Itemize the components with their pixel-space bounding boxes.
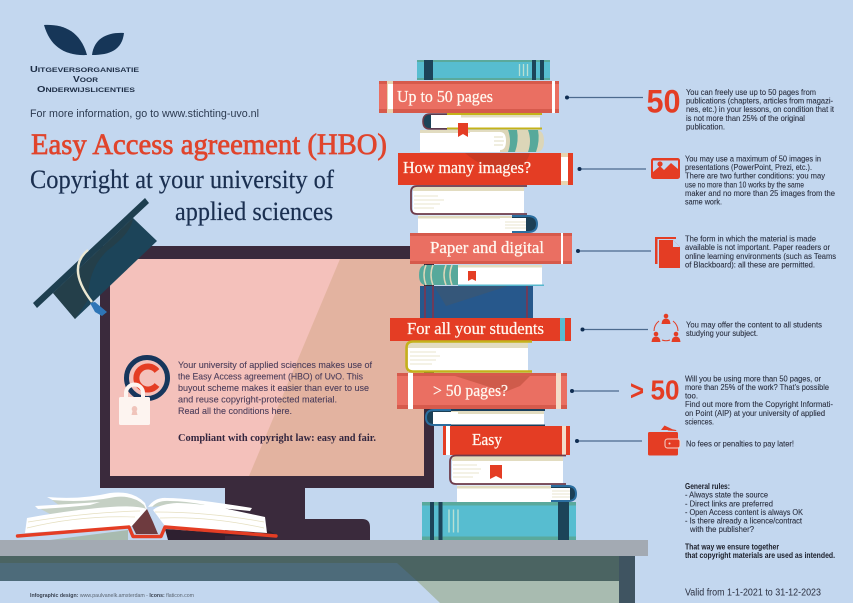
subtitle: Copyright at your university of (30, 164, 334, 194)
book: blue (420, 286, 533, 318)
text: images: There are two further conditions: you may (685, 172, 825, 181)
icon: more than 50 (630, 374, 680, 406)
text: more than 50 pages: too. (685, 392, 698, 401)
text: up to 50 pages (686, 88, 835, 132)
text: images: maker and no more than 25 images from the (685, 189, 835, 198)
intro text on monitor: buyout scheme makes it easier than ever to use (178, 382, 369, 393)
book: easy (443, 426, 570, 455)
intro text on monitor: Read all the conditions here. (178, 405, 292, 416)
text: more than 50 pages (685, 374, 833, 426)
intro text on monitor (178, 359, 376, 444)
text: paper and digital: online learning environments (such as Teams (685, 252, 836, 261)
monitor (100, 246, 434, 540)
text: all students (686, 320, 822, 338)
book: more than 50 pages: > 50 pages? (433, 381, 508, 400)
book: paper and digital (410, 233, 572, 264)
general rules: - Direct links are preferred (685, 499, 773, 508)
text: paper and digital: The form in which the material is made (685, 234, 816, 244)
text: more than 50 pages: Will you be using more than 50 pages, or (685, 374, 821, 384)
text: more than 50 pages: Find out more from the Copyright Informati- (685, 400, 833, 409)
general rules: - Is there already a licence/contract (685, 516, 803, 526)
general rules: That way we ensure together (685, 542, 779, 552)
intro text on monitor: and reuse copyright-protected material. (178, 394, 337, 404)
general rules (685, 482, 835, 560)
icon: image (651, 158, 680, 179)
text: all students: You may offer the content to all students (686, 320, 822, 330)
book: white with blue spine (457, 486, 576, 502)
icon: more than 50: 50 (650, 374, 680, 406)
bookmark (458, 123, 468, 137)
book: paper and digital: Paper and digital (430, 238, 544, 257)
text: up to 50 pages: You can freely use up to 50 pages from (686, 88, 816, 97)
general rules: with the publisher? (689, 525, 755, 534)
book: how many images: How many images? (403, 158, 531, 177)
credits: Infographic design: www.paulvanelk.amsterdam - Icons: flaticon.com (30, 593, 194, 599)
book: up to 50 pages: Up to 50 pages (397, 87, 493, 106)
book stack (379, 60, 576, 540)
text: more than 50 pages: on Point (AIP) at your university of applied (685, 409, 825, 418)
website note: For more information, go to www.stichting-uvo.nl (30, 108, 259, 120)
open book (18, 492, 278, 540)
text: images: use no more than 10 works by the same (685, 180, 804, 189)
icon: students (652, 314, 680, 342)
logo: UvO leaves and wordmark: U ITGEVERSORGANISATIE (30, 65, 139, 74)
text: up to 50 pages: publications (chapters, articles from magazi- (686, 96, 833, 106)
book: white with maroon cover (411, 186, 527, 214)
text: images: You may use a maximum of 50 images in (685, 154, 821, 164)
book: bottom teal (422, 502, 576, 540)
book: how many images (398, 153, 573, 185)
icon: more than 50: > (630, 375, 644, 406)
icon: documents (655, 237, 680, 268)
book: white with dark blue cover (426, 409, 545, 426)
book: top teal (417, 60, 550, 80)
text: more than 50 pages: more than 25% of the work? That’s possible (685, 383, 829, 392)
validity dates: Valid from 1-1-2021 to 31-12-2023 (685, 588, 821, 598)
connector lines (565, 96, 651, 443)
book: more than 50 pages (397, 373, 567, 409)
text: paper and digital: of Blackboard): all these are permitted. (685, 260, 815, 269)
general rules: General rules: (685, 482, 730, 491)
intro text on monitor: Compliant with copyright law: easy and fair. (178, 432, 376, 444)
text: all students: studying your subject. (686, 329, 758, 338)
book: easy: Easy (472, 430, 502, 449)
text: images: presentations (PowerPoint, Prezi, etc.). (685, 163, 812, 172)
text: up to 50 pages: nes, etc.) in your lessons, on condition that it (686, 105, 835, 114)
logo: UvO leaves and wordmark: O NDERWIJSLICENTIES (37, 85, 135, 94)
book: white with teal spine (420, 130, 544, 152)
general rules: that copyright materials are used as intended. (685, 551, 835, 560)
logo: UvO leaves and wordmark (30, 25, 139, 94)
title: Easy Access agreement (HBO) (31, 129, 387, 161)
book: white with yellow cover (406, 342, 532, 372)
icon: copyright and padlock (119, 358, 168, 425)
subtitle (30, 164, 334, 226)
book: for all your students (390, 318, 571, 341)
book: white with yellow cover (423, 113, 542, 130)
book: for all your students: For all your students (407, 319, 544, 338)
intro text on monitor: the Easy Access agreement (HBO) of UvO. This (178, 370, 363, 382)
text: paper and digital (685, 234, 836, 269)
text: up to 50 pages: is not more than 25% of the original (686, 114, 805, 123)
subtitle: applied sciences (175, 196, 333, 226)
text: no fees: No fees or penalties to pay later! (686, 440, 794, 448)
desk (0, 540, 648, 603)
icon: wallet (648, 426, 680, 456)
general rules: - Open Access content is always OK (685, 508, 804, 517)
text: images: same work. (685, 198, 722, 206)
book: green spine (419, 265, 544, 286)
intro text on monitor: Your university of applied sciences makes use of (178, 359, 372, 370)
book: up to 50 pages (379, 81, 559, 113)
text: images (685, 154, 835, 206)
text: more than 50 pages: sciences. (685, 418, 714, 426)
graduation cap (33, 198, 157, 319)
text: up to 50 pages: publication. (686, 122, 725, 132)
general rules: - Always state the source (685, 491, 768, 500)
book: white with maroon cover and bookmark (450, 456, 566, 484)
logo: UvO leaves and wordmark: VOOR (73, 75, 99, 84)
text: paper and digital: available is not important. Paper readers or (685, 243, 830, 252)
icon: number 50: 50 (646, 84, 680, 120)
book: white with blue spine (418, 216, 537, 233)
